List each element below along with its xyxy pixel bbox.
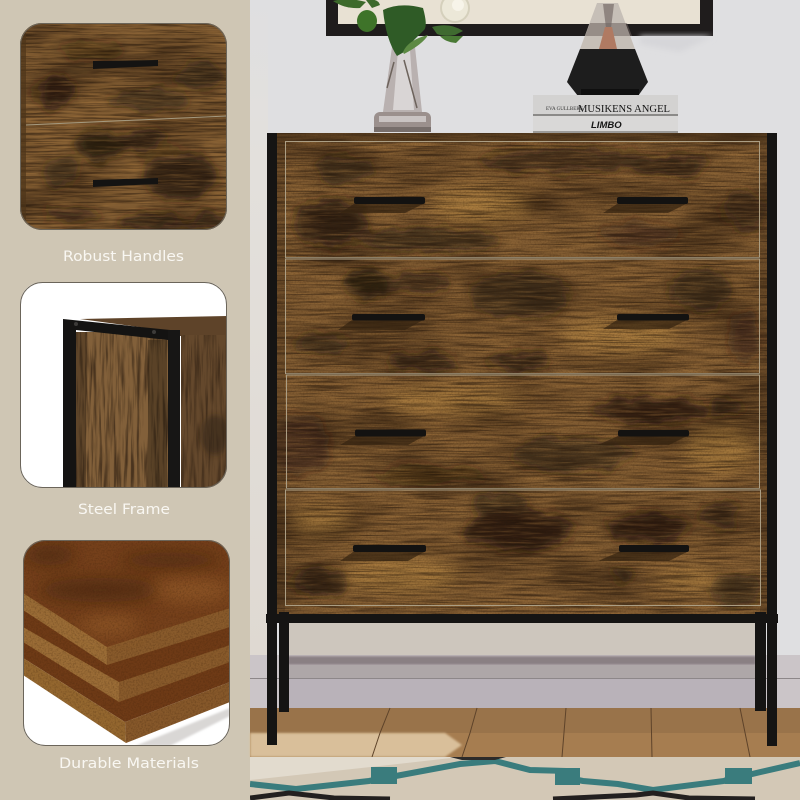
label: robust handles: Robust Handles (63, 249, 184, 265)
thumbnail: steel frame close-up (20, 282, 229, 488)
baseboard (250, 655, 800, 708)
drawer handle shadows (338, 204, 687, 561)
second book title: LIMBO (591, 120, 622, 131)
left wall strip (250, 0, 268, 657)
wall (250, 0, 800, 657)
thumbnail: durable materials stacked boards (23, 540, 230, 746)
dark patina blotches (270, 148, 765, 606)
panel: room photograph (250, 0, 800, 800)
drawer handles (352, 197, 689, 552)
book spine small author: EVA GULLBERG (546, 107, 584, 112)
label: durable materials: Durable Materials (59, 756, 199, 772)
label: steel frame: Steel Frame (78, 502, 170, 518)
thumbnail: robust handles close-up (20, 23, 235, 230)
lighter worn areas (290, 185, 756, 593)
framed picture (326, 0, 713, 52)
black diffuser lamp (567, 3, 648, 96)
patterned rug (250, 757, 800, 800)
wood carcass (270, 133, 767, 614)
wall shadow beneath cabinet (280, 622, 760, 656)
steel frame (266, 133, 778, 746)
book spine title: MUSIKENS ANGEL (578, 104, 670, 115)
middle board (23, 590, 230, 702)
chest of drawers (266, 133, 778, 746)
bottom board (23, 620, 230, 743)
drawer gap shading (286, 258, 760, 490)
stacked books (533, 95, 678, 133)
wood floor (250, 708, 800, 757)
panel: beige feature sidebar (0, 0, 250, 800)
drawer outlines (286, 142, 760, 606)
flower vase (333, 0, 470, 132)
top board (23, 540, 230, 665)
